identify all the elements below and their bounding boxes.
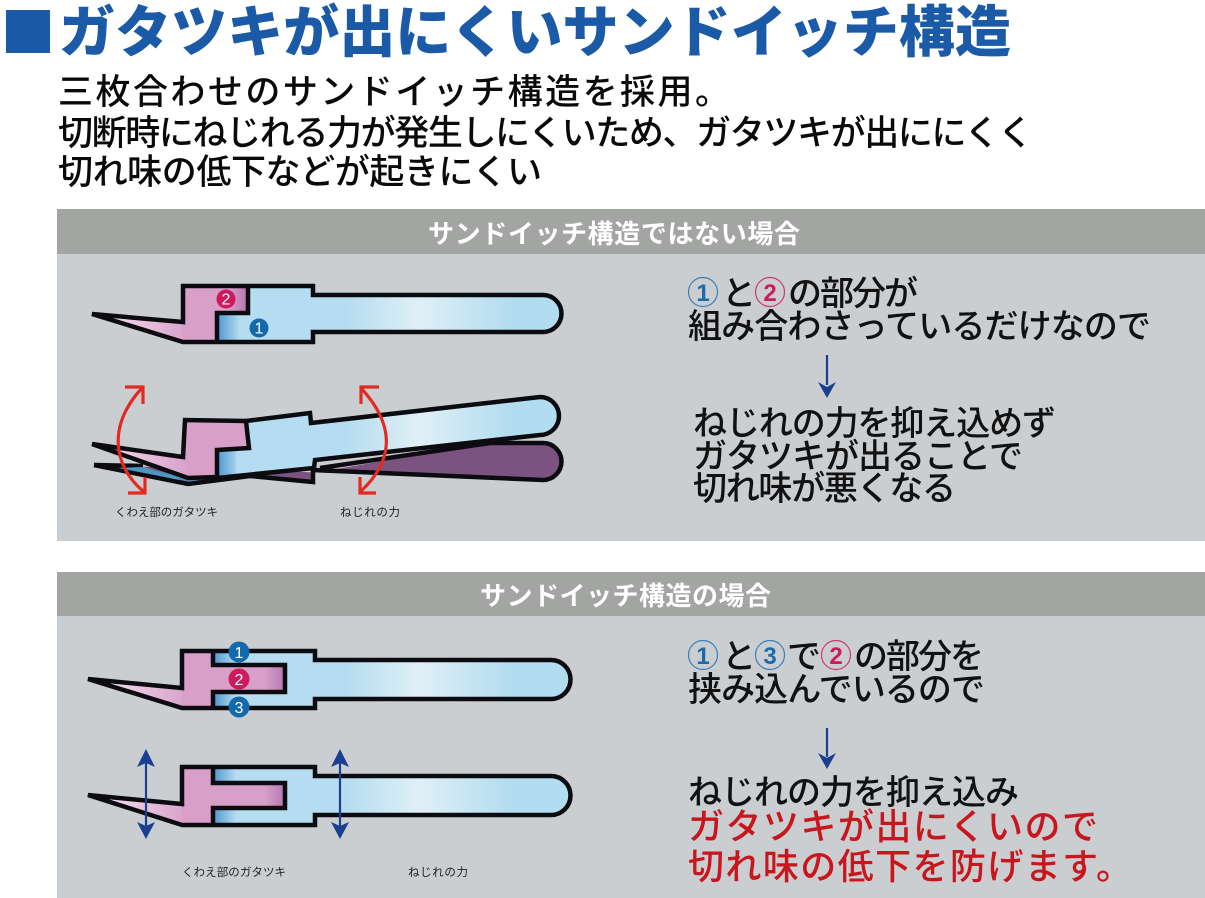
panel heading	[57, 209, 1205, 254]
panel heading: サンドイッチ構造ではない場合	[428, 219, 800, 249]
arrow: jaw double-headed	[137, 749, 155, 839]
badge 1: 1	[255, 320, 264, 338]
badge 2	[216, 290, 236, 308]
title: ガタツキが出にくいサンドイッチ構造	[59, 1, 1011, 64]
red conclusion text: 切れ味の低下を防げます。	[688, 846, 1132, 887]
explanation text: 2	[829, 643, 843, 670]
explanation text: の部分を	[854, 638, 984, 676]
badge 2	[228, 668, 250, 690]
explanation text: 1	[696, 280, 710, 307]
explanation text: 挟み込んでいるので	[688, 671, 985, 709]
explanation text: 切れ味が悪くなる	[693, 470, 956, 508]
badge 1: 1	[235, 645, 244, 662]
explanation text: と	[722, 275, 756, 313]
lead text: 切断時にねじれる力が発生しにくいため、ガタツキが出ににくく	[58, 114, 1033, 153]
red conclusion text: ガタツキが出にくいので	[688, 806, 1098, 847]
label: jaw play: くわえ部のガタツキ	[115, 506, 218, 519]
explanation text: ガタツキが出ることで	[693, 438, 1023, 476]
explanation text: ねじれの力を抑え込めず	[693, 405, 1056, 443]
label: twisting force: ねじれの力	[408, 866, 468, 879]
explanation text: 1	[696, 643, 710, 670]
panel: sandwich structure	[57, 572, 1205, 898]
badge 3	[228, 696, 250, 718]
lead text: 切れ味の低下などが起きにくい	[58, 153, 542, 192]
badge 2: 2	[222, 292, 231, 308]
explanation text: 2	[763, 280, 777, 307]
badge 1	[228, 642, 250, 662]
explanation text: で	[787, 638, 821, 676]
panel: non-sandwich structure	[57, 209, 1205, 541]
badge 2: 2	[235, 672, 244, 689]
badge 3: 3	[235, 700, 244, 717]
arrow: handle double-headed	[331, 749, 349, 839]
explanation text: ねじれの力を抑え込み	[688, 774, 1019, 812]
arrow: left twist	[118, 387, 145, 493]
label: jaw play: くわえ部のガタツキ	[182, 866, 286, 879]
badge 1	[250, 318, 268, 338]
lead text: 三枚合わせのサンドイッチ構造を採用。	[58, 73, 730, 112]
explanation text	[688, 275, 1151, 508]
diagram: pliers twisting	[92, 387, 562, 519]
diagram: sandwich pliers under force	[88, 749, 570, 879]
lower blade, blue	[118, 467, 215, 482]
diagram: pliers at rest	[92, 286, 561, 342]
explanation text: の部分が	[788, 275, 918, 313]
explanation text: 組み合わさっているだけなので	[688, 308, 1151, 346]
explanation text: と	[722, 638, 756, 676]
diagram: sandwich pliers at rest	[88, 642, 570, 718]
explanation text	[688, 638, 1132, 887]
lead text	[58, 73, 1033, 192]
panel heading: サンドイッチ構造の場合	[480, 581, 771, 611]
arrow: down	[818, 355, 836, 398]
red conclusion text	[688, 806, 1132, 887]
arrow: right twist	[360, 387, 386, 493]
explanation text: 3	[763, 643, 777, 670]
panel heading	[57, 572, 1205, 616]
label: twisting force: ねじれの力	[340, 506, 400, 519]
arrow: down	[818, 728, 836, 769]
